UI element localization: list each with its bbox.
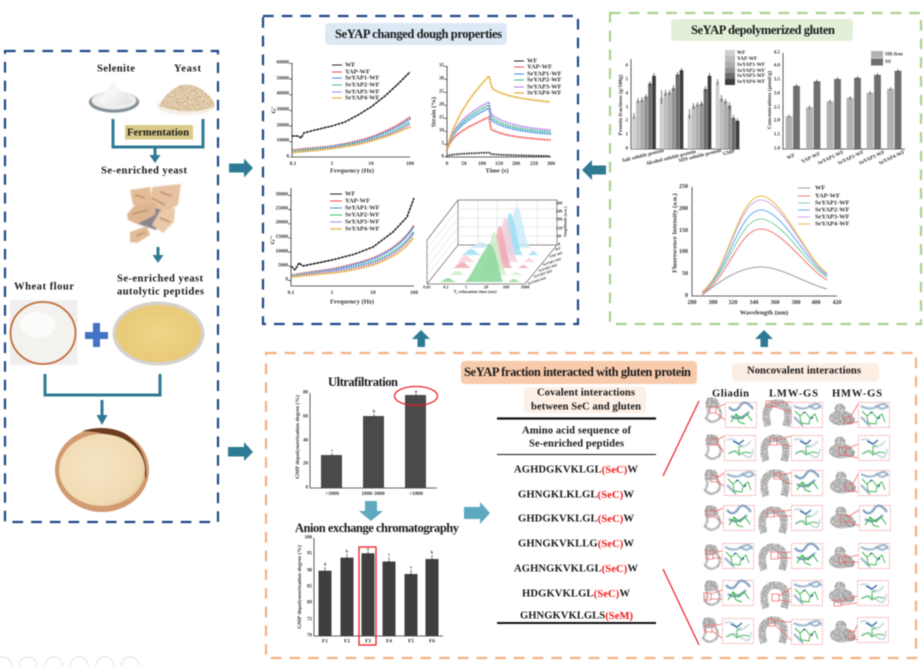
chart: G' storage modulus: 20000 bbox=[276, 124, 290, 128]
label: Se-enriched yeast autolytic peptides: autolytic peptides bbox=[117, 286, 204, 298]
chart: SH-free and SS concentrations: 1.5 bbox=[774, 132, 780, 138]
chart: anion exchange bars: F2 bbox=[344, 638, 350, 644]
chart: anion exchange bars bbox=[296, 536, 443, 645]
chart: ultrafiltration bars: 60 bbox=[303, 414, 308, 420]
chart: strain over time: 25 bbox=[439, 90, 444, 94]
chart: G'' loss modulus: SeYAP4-WF bbox=[345, 226, 380, 232]
icon: plus sign bbox=[85, 323, 108, 347]
chart: 3D T2 relaxation waterfall: SeYAP2-WF bbox=[538, 263, 559, 273]
label: amino acid sequence header bbox=[522, 426, 631, 450]
chart: strain over time: WF bbox=[527, 58, 537, 64]
label: Se-enriched yeast autolytic peptides bbox=[117, 274, 204, 298]
heading: fraction interaction bbox=[461, 361, 697, 384]
chart: ultrafiltration bars bbox=[294, 386, 438, 497]
docking row 5 bbox=[704, 544, 890, 570]
chart: G'' loss modulus bbox=[270, 188, 418, 306]
chart: G' storage modulus: 40000 bbox=[276, 92, 290, 96]
chart: 3D T2 relaxation waterfall: 120 bbox=[556, 226, 563, 230]
image: dough in wooden bowl bbox=[55, 428, 149, 512]
heading: covalent interactions: between SeC and gluten bbox=[531, 402, 641, 412]
chart: G'' loss modulus: 20000 bbox=[276, 220, 288, 226]
heading: covalent interactions bbox=[524, 387, 646, 413]
panel: SeYAP fraction interacted with gluten protein bbox=[266, 353, 916, 658]
arrow: gluten panel to dough panel bbox=[582, 160, 606, 180]
chart: G' storage modulus: SeYAP2-WF bbox=[345, 82, 380, 88]
label: LMW-GS: LMW-GS bbox=[769, 388, 818, 400]
chart: protein fractions bars: Alcohol soluble protein bbox=[645, 149, 697, 167]
chart: anion exchange bars: 90 bbox=[307, 568, 312, 574]
chart: G' storage modulus: WF bbox=[345, 62, 355, 68]
chart: ultrafiltration bars: 0 bbox=[306, 486, 308, 490]
chart: G'' loss modulus: 30000 bbox=[276, 192, 288, 198]
chart: G'' loss modulus: 0 bbox=[286, 278, 288, 282]
chart: strain over time bbox=[430, 58, 562, 174]
chart: G' storage modulus: 10000 bbox=[276, 138, 290, 144]
chart: protein fractions bars: GMP bbox=[722, 148, 736, 157]
arrow: ultrafiltration to chromatography bbox=[359, 501, 383, 521]
chart: anion exchange bars: 75 bbox=[307, 618, 312, 622]
docking row 1 bbox=[706, 398, 890, 428]
chart: fluorescence spectra: SeYAP2-WF bbox=[815, 206, 850, 214]
label: Se-enriched yeast autolytic peptides: Se-enriched yeast bbox=[117, 274, 203, 284]
chart: protein fractions bars: 3 bbox=[626, 106, 628, 110]
chart: protein fractions bars: Salt soluble protein bbox=[621, 148, 665, 164]
chart: anion exchange bars: a bbox=[367, 546, 370, 551]
arrow: preparation to fraction panel bbox=[228, 442, 253, 461]
chart: G' storage modulus: 0.1 bbox=[290, 161, 297, 167]
chart: fluorescence spectra: 300 bbox=[708, 300, 718, 306]
chart: 3D T2 relaxation waterfall: WF bbox=[555, 246, 562, 252]
chart: strain over time: 35 bbox=[439, 64, 444, 68]
chart: SH-free and SS concentrations: SeYAP4-WF bbox=[878, 149, 906, 167]
chart: G' storage modulus: 60000 bbox=[276, 60, 290, 66]
chart: strain over time: YAP-WF bbox=[527, 64, 552, 70]
chart: ultrafiltration bars: GMP depolymerization degree (%) bbox=[294, 395, 301, 479]
label: Yeast: Yeast bbox=[174, 64, 201, 74]
chart: 3D T2 relaxation waterfall: 0.1 bbox=[443, 284, 449, 290]
image: selenite powder on dish bbox=[89, 82, 139, 112]
chart: SH-free and SS concentrations: 3.0 bbox=[774, 92, 780, 96]
chart: protein fractions bars: 6 bbox=[626, 64, 628, 68]
label: Fermentation: Fermentation bbox=[127, 128, 189, 138]
bracket: mix to dough bbox=[45, 374, 160, 395]
chart: ultrafiltration bars: >3000 bbox=[325, 491, 339, 497]
chart: protein fractions bars: SeYAP4-WF bbox=[737, 79, 765, 85]
chart: anion exchange bars: 95 bbox=[307, 552, 312, 556]
panel: SeYAP changed dough properties bbox=[263, 16, 578, 324]
chart: protein fractions bars: SDS soluble protein bbox=[678, 148, 722, 164]
heading: depolymerized gluten: SeYAP depolymerized gluten bbox=[691, 23, 835, 37]
label: Fermentation bbox=[125, 125, 193, 140]
highlight: red ellipse bbox=[394, 386, 438, 406]
chart: anion exchange bars: GMP depolymerization degree (%) bbox=[296, 545, 303, 629]
chart: ultrafiltration bars: 40 bbox=[303, 438, 308, 444]
bracket: fermentation inputs bbox=[113, 119, 203, 147]
chart: G' storage modulus: G' bbox=[270, 106, 278, 113]
chart: 3D T2 relaxation waterfall: 240 bbox=[556, 208, 563, 214]
chart: G' storage modulus: YAP-WF bbox=[345, 68, 370, 76]
chart: fluorescence spectra: 380 bbox=[792, 300, 800, 306]
arrow: to Se-enriched yeast bbox=[150, 147, 160, 163]
chart: G' storage modulus: SeYAP4-WF bbox=[345, 94, 380, 102]
chart: strain over time: 15 bbox=[439, 116, 444, 120]
chart: SH-free and SS concentrations: 4.5 bbox=[774, 50, 780, 56]
chart: G'' loss modulus: 100 bbox=[410, 290, 418, 296]
heading: Ultrafiltration: Ultrafiltration bbox=[328, 375, 398, 389]
image: peptide powder bowl bbox=[112, 302, 204, 366]
chart: anion exchange bars: F4 bbox=[386, 638, 392, 644]
chart: G'' loss modulus: 10000 bbox=[276, 250, 288, 254]
chart: protein fractions bars: 2 bbox=[626, 118, 628, 124]
chart: G'' loss modulus: SeYAP3-WF bbox=[345, 218, 380, 226]
chart: strain over time: 30 bbox=[439, 76, 444, 82]
arrow: fraction panel up to dough panel bbox=[412, 330, 430, 347]
chart: strain over time: 300 bbox=[547, 161, 555, 167]
chart: G'' loss modulus: YAP-WF bbox=[345, 198, 370, 204]
panel: SeYAP depolymerized gluten bbox=[610, 13, 921, 324]
chart: ultrafiltration bars: 1000-3000 bbox=[361, 491, 385, 497]
chart: strain over time: 5 bbox=[442, 142, 444, 146]
arrow: preparation to dough properties bbox=[229, 158, 253, 178]
chart: protein fractions bars: YAP-WF bbox=[737, 56, 757, 62]
highlight: red box on F3 bbox=[359, 547, 376, 645]
chart: 3D T2 relaxation waterfall: 300 bbox=[556, 200, 563, 206]
chart: ultrafiltration bars: c bbox=[331, 448, 333, 452]
label: amino acid sequence header: Se-enriched peptides bbox=[529, 438, 624, 450]
decoration: faint toolbar icons at bottom left bbox=[0, 657, 139, 666]
sequence 4: GHNGKVKLLG(SeC)W bbox=[518, 538, 634, 550]
chart: anion exchange bars: F6 bbox=[429, 638, 435, 644]
chart: protein fractions bars: 4 bbox=[626, 92, 628, 96]
docking row 2 bbox=[706, 434, 890, 461]
label: Gliadin: Gliadin bbox=[712, 388, 749, 400]
chart: G'' loss modulus: SeYAP1-WF bbox=[345, 204, 380, 212]
chart: 3D T2 relaxation waterfall: 1000 bbox=[521, 284, 530, 290]
chart: ultrafiltration bars: a bbox=[415, 388, 418, 394]
sequence 2: GHNGKLKLGL(SeC)W bbox=[518, 490, 634, 500]
chart: fluorescence spectra: 340 bbox=[750, 300, 758, 306]
chart: protein fractions bars bbox=[617, 50, 765, 167]
sequence 5: AGHNGKVKLGL(SeC)W bbox=[514, 564, 638, 574]
chart: anion exchange bars: 100 bbox=[304, 536, 312, 540]
chart: 3D T2 relaxation waterfall: 180 bbox=[556, 216, 563, 222]
chart: SH-free and SS concentrations: 3.5 bbox=[774, 78, 780, 82]
chart: strain over time: 10 bbox=[439, 128, 444, 134]
heading: fraction interaction: SeYAP fraction interacted with gluten protein bbox=[464, 365, 691, 379]
chart: G' storage modulus: 10 bbox=[368, 161, 374, 167]
label: Wheat flour: Wheat flour bbox=[14, 282, 74, 292]
chart: strain over time: SeYAP3-WF bbox=[527, 84, 562, 90]
chart: 3D T2 relaxation waterfall: SeYAP3-WF bbox=[533, 269, 554, 279]
arrow: chromatography to sequences bbox=[464, 502, 490, 524]
chart: 3D T2 relaxation waterfall: 0 bbox=[558, 242, 561, 246]
chart: strain over time: SeYAP2-WF bbox=[527, 76, 562, 84]
heading: dough properties: SeYAP changed dough properties bbox=[335, 27, 502, 41]
chart: fluorescence spectra: 400 bbox=[812, 300, 820, 306]
chart: fluorescence spectra: Wavelength (nm) bbox=[740, 310, 788, 316]
chart: anion exchange bars: b bbox=[431, 550, 434, 554]
chart: G' storage modulus: 0 bbox=[286, 154, 290, 160]
chart: fluorescence spectra bbox=[672, 184, 850, 316]
chart: fluorescence spectra: WF bbox=[815, 184, 825, 192]
image: yeast powder pile bbox=[157, 85, 215, 115]
chart: protein fractions bars: 5 bbox=[626, 78, 628, 82]
chart: anion exchange bars: F5 bbox=[408, 638, 414, 644]
image: wheat flour bowl bbox=[10, 300, 78, 365]
chart: 3D T2 relaxation waterfall: SeYAP4-WF bbox=[527, 276, 548, 286]
label: Selenite: Selenite bbox=[97, 64, 135, 74]
chart: strain over time: 100 bbox=[478, 161, 486, 167]
chart: 3D T2 relaxation waterfall: 1 bbox=[465, 284, 467, 290]
chart: 3D T2 relaxation waterfall: T₂ relaxation time (ms) bbox=[453, 289, 497, 294]
docking row 6 bbox=[704, 580, 888, 608]
chart: anion exchange bars: b bbox=[346, 548, 349, 554]
chart: fluorescence spectra: SeYAP1-WF bbox=[815, 200, 850, 206]
chart: strain over time: 0 bbox=[442, 154, 444, 160]
chart: anion exchange bars: d bbox=[324, 562, 327, 566]
chart: fluorescence spectra: 360 bbox=[770, 300, 780, 306]
chart: G'' loss modulus: 1 bbox=[331, 290, 334, 296]
chart: SH-free and SS concentrations: 2.0 bbox=[774, 118, 780, 124]
chart: fluorescence spectra: 420 bbox=[832, 300, 842, 306]
chart: SH-free and SS concentrations: YAP-WF bbox=[801, 151, 821, 165]
chart: fluorescence spectra: 200 bbox=[679, 206, 688, 212]
chart: strain over time: Time (s) bbox=[485, 168, 509, 174]
chart: G'' loss modulus: 15000 bbox=[276, 235, 288, 240]
chart: G'' loss modulus: Frequency (Hz) bbox=[330, 298, 374, 306]
chart: 3D T2 relaxation waterfall: SeYAP1-WF bbox=[542, 257, 563, 267]
chart: fluorescence spectra: SeYAP4-WF bbox=[815, 220, 850, 228]
arrow: to dough bbox=[96, 400, 108, 425]
chart: fluorescence spectra: 320 bbox=[728, 300, 738, 306]
docking row 4 bbox=[704, 506, 890, 533]
chart: protein fractions bars: WF bbox=[737, 50, 745, 56]
label: amino acid sequence header: Amino acid sequence of bbox=[522, 426, 631, 436]
chart: SH-free and SS concentrations: SS bbox=[885, 59, 891, 65]
chart: G'' loss modulus: G'' bbox=[270, 235, 276, 244]
arrow: fraction panel up to gluten panel bbox=[755, 330, 773, 347]
sequence 3: GHDGKVKLGL(SeC)W bbox=[518, 514, 634, 524]
docking row 7 bbox=[702, 618, 888, 644]
chart: SH-free and SS concentrations: 2.5 bbox=[774, 106, 780, 110]
heading: Noncovalent interactions: Noncovalent interactions bbox=[747, 366, 861, 376]
chart: 3D T2 relaxation waterfall: 10 bbox=[484, 284, 489, 290]
chart: protein fractions bars: 1 bbox=[626, 132, 628, 138]
heading: covalent interactions: Covalent interactions bbox=[537, 388, 635, 398]
chart: G'' loss modulus: SeYAP2-WF bbox=[345, 212, 380, 218]
heading: Anion exchange chromatography: Anion exchange chromatography bbox=[295, 521, 460, 535]
chart: 3D T2 relaxation waterfall: 60 bbox=[557, 234, 562, 238]
chart: SH-free and SS concentrations: 4.0 bbox=[774, 64, 780, 68]
chart: fluorescence spectra: 150 bbox=[679, 228, 688, 234]
chart: G' storage modulus: 100 bbox=[406, 161, 414, 167]
chart: anion exchange bars: F3 bbox=[365, 638, 371, 644]
chart: anion exchange bars: 85 bbox=[307, 584, 312, 590]
docking row 3 bbox=[704, 470, 890, 496]
chart: fluorescence spectra: 50 bbox=[682, 271, 688, 277]
chart: anion exchange bars: 80 bbox=[307, 600, 312, 606]
sequence 6: HDGKVKLGL(SeC)W bbox=[522, 588, 630, 600]
chart: fluorescence spectra: YAP-WF bbox=[815, 192, 840, 200]
chart: G' storage modulus bbox=[270, 60, 414, 174]
chart: 3D T2 relaxation waterfall: Amplitude (a.u.) bbox=[562, 206, 568, 237]
chart: strain over time: 200 bbox=[512, 161, 520, 167]
connector: red expansion lines bbox=[663, 401, 699, 645]
chart: protein fractions bars: SeYAP2-WF bbox=[737, 68, 765, 74]
sequence 1: AGHDGKVKLGL(SeC)W bbox=[514, 464, 638, 476]
heading: dough properties bbox=[325, 23, 507, 45]
chart: G'' loss modulus: 10 bbox=[370, 290, 376, 296]
chart: protein fractions bars: Protein fractions (g/100g) bbox=[617, 74, 624, 135]
chart: anion exchange bars: F1 bbox=[322, 638, 328, 644]
table: Se-enriched peptide sequences bbox=[497, 387, 656, 623]
chart: strain over time: 250 bbox=[530, 161, 538, 167]
chart: ultrafiltration bars: 80 bbox=[303, 390, 308, 396]
chart: fluorescence spectra: 100 bbox=[679, 249, 688, 255]
label: Se-enriched yeast: Se-enriched yeast bbox=[101, 166, 187, 176]
heading: Noncovalent interactions bbox=[732, 363, 879, 382]
chart: strain over time: Strain (%) bbox=[430, 97, 438, 127]
chart: strain over time: 0 bbox=[446, 161, 449, 167]
chart: 3D T2 relaxation waterfall bbox=[423, 200, 568, 294]
chart: 3D T2 relaxation waterfall: 100 bbox=[503, 284, 510, 290]
chart: G'' loss modulus: 0.1 bbox=[288, 290, 295, 296]
chart: ultrafiltration bars: b bbox=[373, 408, 376, 414]
chart: G'' loss modulus: WF bbox=[345, 190, 355, 198]
chart: protein fractions bars: 0 bbox=[626, 146, 628, 152]
chart: SH-free and SS concentrations: SeYAP1-WF bbox=[817, 149, 845, 167]
heading: depolymerized gluten bbox=[671, 19, 853, 41]
chart: G'' loss modulus: 25000 bbox=[276, 206, 288, 212]
sequence 7: GHNGKVKLGLS(SeM) bbox=[520, 610, 633, 622]
chart: strain over time: 50 bbox=[461, 161, 467, 167]
chart: SH-free and SS concentrations: SeYAP2-WF bbox=[837, 149, 865, 167]
chart: strain over time: 150 bbox=[495, 161, 503, 167]
label: HMW-GS: HMW-GS bbox=[832, 388, 882, 400]
panel: yeast and dough preparation bbox=[5, 51, 218, 522]
chart: fluorescence spectra: 0 bbox=[685, 293, 688, 299]
chart: G' storage modulus: 30000 bbox=[276, 108, 290, 112]
chart: SH-free and SS concentrations: SH-free bbox=[885, 52, 903, 58]
chart: protein fractions bars: SeYAP1-WF bbox=[737, 62, 765, 68]
chart: SH-free and SS concentrations: WF bbox=[786, 153, 796, 161]
chart: G' storage modulus: SeYAP1-WF bbox=[345, 74, 380, 82]
chart: G' storage modulus: 1 bbox=[331, 161, 334, 167]
chart: G' storage modulus: SeYAP3-WF bbox=[345, 88, 380, 96]
chart: fluorescence spectra: SeYAP3-WF bbox=[815, 214, 850, 220]
chart: protein fractions bars: SeYAP3-WF bbox=[737, 73, 765, 79]
chart: 3D T2 relaxation waterfall: 0.01 bbox=[423, 284, 431, 290]
chart: G' storage modulus: Frequency (Hz) bbox=[330, 168, 374, 174]
chart: strain over time: 20 bbox=[439, 102, 444, 108]
arrow: to peptides bbox=[152, 247, 164, 263]
chart: SH-free and SS concentrations: Concentrations (μmol/g) bbox=[766, 71, 773, 129]
chart: ultrafiltration bars: <1000 bbox=[409, 491, 423, 497]
chart: anion exchange bars: c bbox=[388, 552, 390, 556]
chart: 3D T2 relaxation waterfall: YAP-WF bbox=[549, 251, 564, 259]
chart: fluorescence spectra: 250 bbox=[679, 184, 688, 190]
chart: fluorescence spectra: Fluorescence Intensity (a.u.) bbox=[672, 193, 678, 273]
chart: G'' loss modulus: 5000 bbox=[278, 264, 288, 268]
chart: strain over time: SeYAP4-WF bbox=[527, 90, 562, 96]
chart: fluorescence spectra: 280 bbox=[688, 300, 696, 306]
image: Se-enriched yeast chunks bbox=[127, 184, 181, 243]
chart: G' storage modulus: 50000 bbox=[276, 76, 290, 82]
chart: SH-free and SS concentrations: SeYAP3-WF bbox=[858, 149, 886, 167]
chart: anion exchange bars: e bbox=[410, 564, 412, 570]
chart: SH-free and SS concentrations bbox=[766, 50, 906, 167]
docking grid: peptide and gluten subunit models bbox=[702, 398, 890, 644]
chart: ultrafiltration bars: 20 bbox=[303, 462, 308, 466]
chart: strain over time: SeYAP1-WF bbox=[527, 70, 562, 78]
chart: anion exchange bars: 70 bbox=[307, 634, 312, 638]
chart: SH-free and SS concentrations: 1.0 bbox=[774, 146, 780, 152]
